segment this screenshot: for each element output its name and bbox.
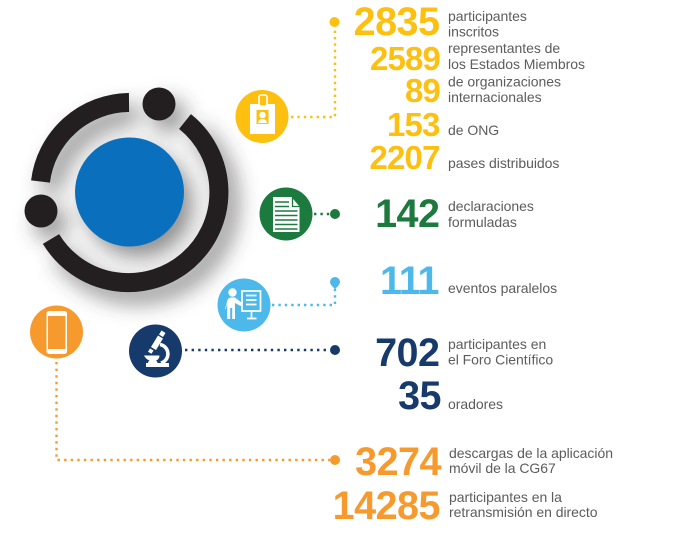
ring dot: left (24, 194, 58, 228)
stat: 111 eventos paralelos: 111 (380, 259, 439, 303)
stat: 142 declaraciones: formuladas (448, 214, 517, 230)
stat: 2589 representantes (370, 40, 585, 77)
icon: badge (236, 90, 288, 143)
stat: 153 ONG: 153 (387, 106, 440, 143)
stat: 14285 retransmisión: 14285 (333, 484, 440, 528)
connector: light blue (272, 277, 340, 305)
stat: 702 Foro Científico: participantes en (448, 336, 546, 352)
stat: 35 oradores: oradores (448, 396, 503, 412)
stat: 2589 representantes: los Estados Miembros (448, 56, 585, 72)
stat: 89 organizaciones: de organizaciones (448, 74, 561, 90)
ring dot: top (142, 88, 176, 120)
stat: 142 declaraciones: 142 (375, 192, 440, 236)
stat: 702 Foro Científico: 702 (375, 331, 440, 375)
stat: 14285 retransmisión (333, 484, 598, 528)
stat: 3274 descargas: 3274 (355, 440, 442, 484)
connector: yellow (291, 17, 340, 117)
icon: document (260, 188, 312, 240)
stat: 89 organizaciones: internacionales (448, 89, 542, 105)
stat: 111 eventos paralelos: eventos paralelos (448, 280, 557, 296)
stat: 702 Foro Científico: el Foro Científico (448, 352, 553, 368)
stat: 702 Foro Científico (375, 331, 553, 375)
connector: green (314, 209, 340, 219)
stat: 2207 pases: 2207 (369, 139, 440, 176)
stat: 2835 participantes inscritos (354, 0, 527, 44)
stat: 2207 pases (369, 139, 559, 176)
stat: 3274 descargas: móvil de la CG67 (449, 460, 556, 476)
connector: orange (56, 362, 340, 465)
ring arc: upper left (40, 102, 129, 182)
ring arc: right and bottom (51, 122, 219, 283)
central ring graphic (24, 88, 228, 294)
stat: 142 declaraciones (375, 192, 534, 236)
icon: microscope (129, 324, 182, 378)
stat: 111 eventos paralelos (380, 259, 557, 303)
stat: 2589 representantes: representantes de (448, 40, 560, 56)
stat: 2589 representantes: 2589 (370, 40, 440, 77)
stat: 14285 retransmisión: participantes en la (449, 489, 562, 505)
stat: 153 ONG (387, 106, 499, 143)
stat: 3274 descargas (355, 440, 613, 484)
icon: smartphone (30, 306, 83, 358)
stat: 89 organizaciones (405, 72, 561, 109)
stat: 3274 descargas: descargas de la aplicación (449, 445, 613, 461)
stat: 35 oradores: 35 (398, 374, 441, 418)
stat: 35 oradores (398, 374, 503, 418)
stat: 89 organizaciones: 89 (405, 72, 440, 109)
stat: 2835 participantes inscritos: 2835 (354, 0, 440, 44)
connector: navy (185, 345, 340, 355)
stat: 142 declaraciones: declaraciones (448, 198, 534, 214)
stat: 2835 participantes inscritos: participantes (448, 8, 527, 24)
stat: 2835 participantes inscritos: inscritos (448, 24, 499, 40)
stat: 14285 retransmisión: retransmisión en directo (449, 504, 598, 520)
stat: 2207 pases: pases distribuidos (448, 155, 559, 171)
icon: presenter at board (218, 278, 270, 332)
blue centre circle (75, 138, 184, 246)
stat: 153 ONG: de ONG (448, 122, 499, 138)
